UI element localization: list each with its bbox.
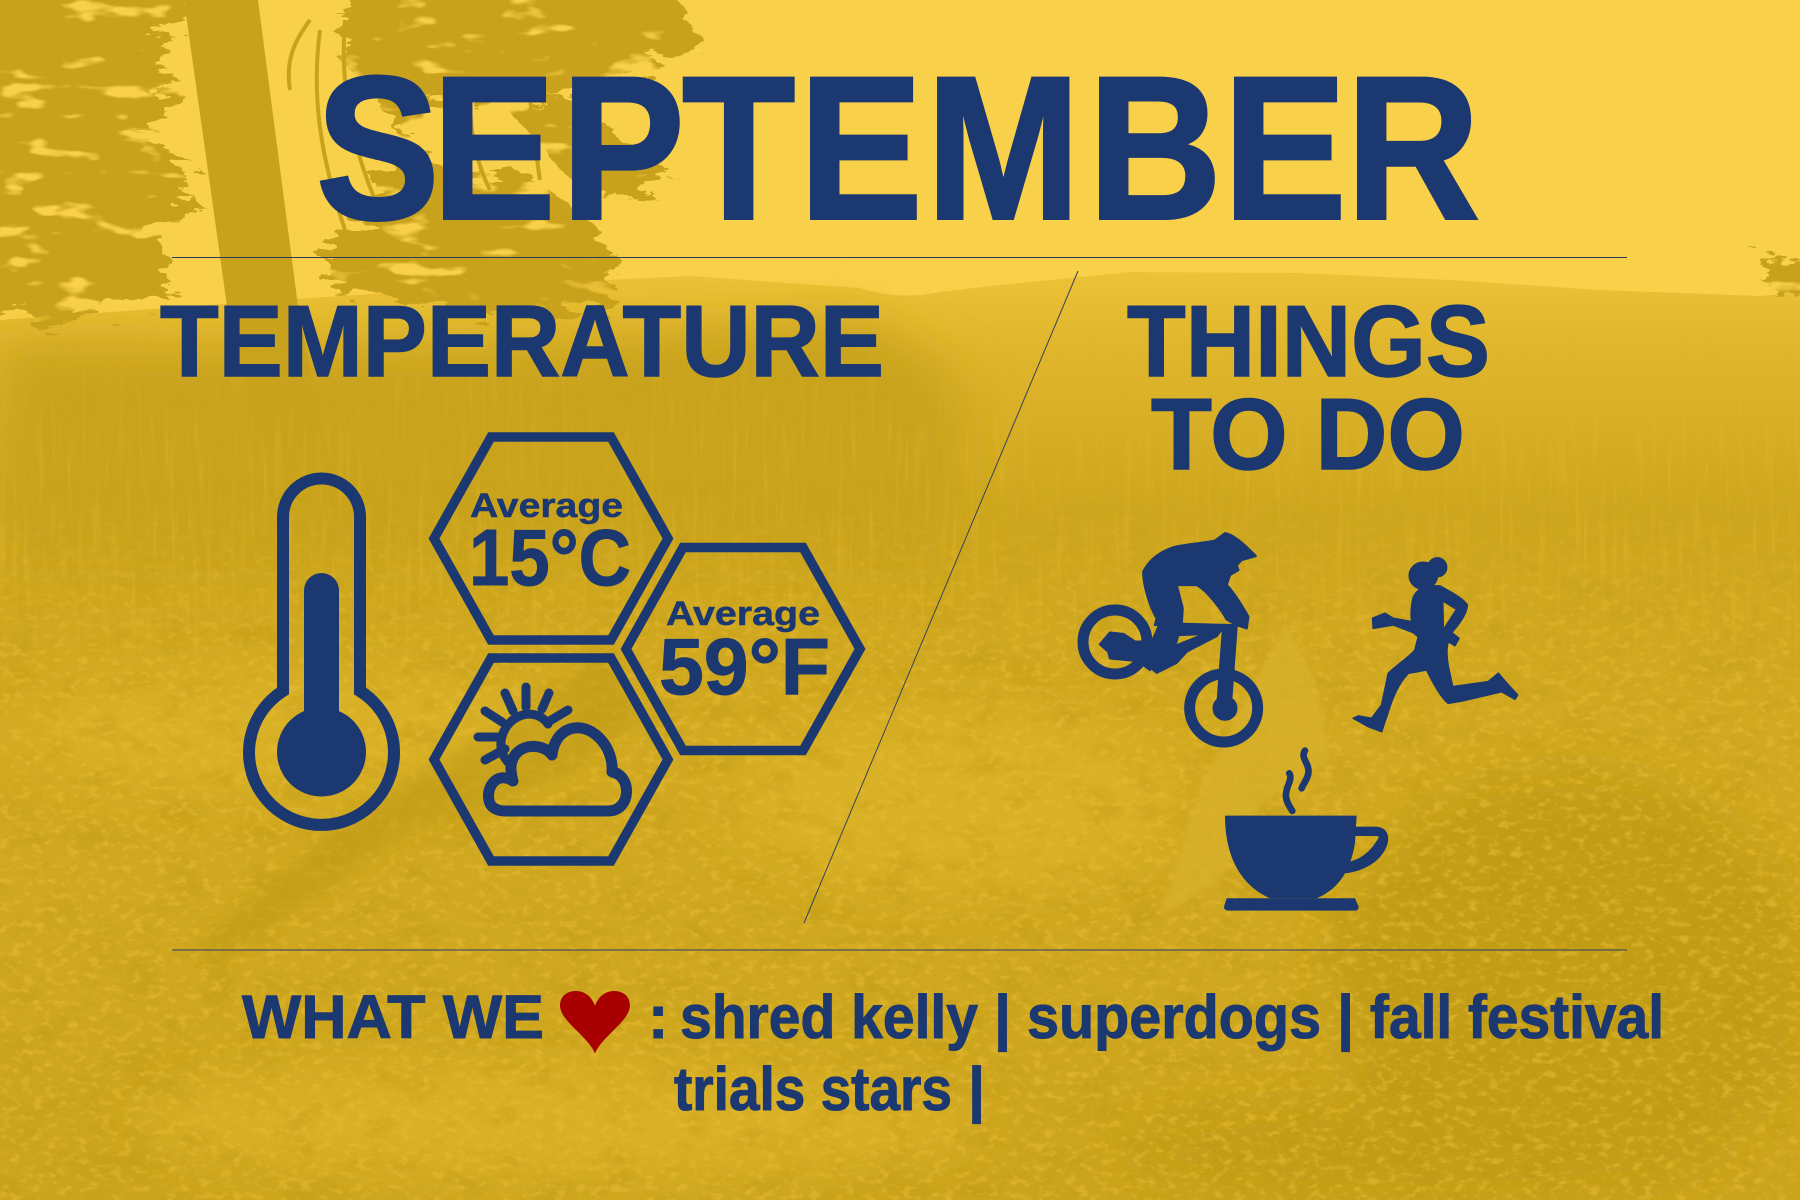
divider top xyxy=(172,256,1627,258)
diagonal divider xyxy=(804,271,1078,923)
what we love line: : xyxy=(648,983,668,1051)
icon: cloud xyxy=(488,728,627,811)
blurred rider in the background xyxy=(195,640,640,965)
what we love line: | xyxy=(1337,983,1354,1053)
hexagon: celsius xyxy=(434,437,668,640)
what we love line: | xyxy=(968,1055,985,1125)
left dark hill xyxy=(0,318,960,560)
grass texture xyxy=(0,429,1585,608)
icon: runner xyxy=(1353,558,1518,732)
heading: temperature: TEMPERATURE xyxy=(160,286,884,398)
darker ground patches xyxy=(1120,770,1800,1200)
what we love line: | xyxy=(994,983,1011,1053)
trees xyxy=(0,0,1800,325)
what we love line: superdogs xyxy=(1027,983,1321,1051)
icon: mountain biker xyxy=(1083,533,1258,742)
icon: heart xyxy=(560,991,630,1054)
hexagon: sun and cloud xyxy=(434,658,668,861)
what we love line: shred kelly xyxy=(680,983,978,1051)
title: SEPTEMBER xyxy=(316,35,1480,262)
hexagon: fahrenheit: Average xyxy=(666,595,820,633)
what we love line: WHAT WE xyxy=(242,983,544,1051)
heading: things to do: THINGS xyxy=(1127,286,1490,398)
what we love line: trials stars xyxy=(674,1055,952,1123)
tree trunk xyxy=(184,0,332,480)
ground texture xyxy=(0,581,1800,1200)
heading: things to do xyxy=(1127,286,1490,491)
icon: coffee cup xyxy=(1224,751,1388,911)
tree stump xyxy=(1160,625,1330,915)
divider bottom xyxy=(172,949,1627,951)
icon: thermometer xyxy=(249,479,394,825)
hexagon: fahrenheit xyxy=(626,548,860,750)
what we love line xyxy=(242,983,1664,1125)
hanging strands xyxy=(289,20,540,230)
what we love line: fall festival xyxy=(1370,983,1664,1051)
icon: sun xyxy=(478,687,568,762)
hexagon: fahrenheit: 59°F xyxy=(659,622,830,711)
trail light patches xyxy=(20,670,1190,1180)
heading: things to do: TO DO xyxy=(1151,379,1465,491)
hexagon: celsius: Average xyxy=(470,487,623,525)
hexagon: celsius: 15°C xyxy=(469,513,631,602)
